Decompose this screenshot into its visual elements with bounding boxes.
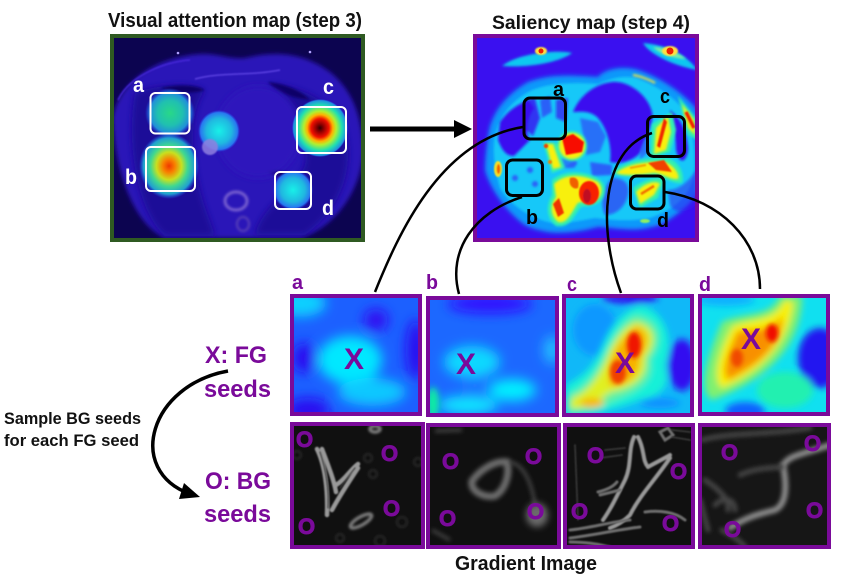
gradient panel b (428, 425, 559, 547)
box d (630, 176, 664, 209)
heading: FG seeds: seeds (204, 376, 271, 403)
label d: d (657, 210, 669, 232)
label b: b (426, 272, 438, 294)
BG seed markers (721, 431, 823, 542)
heading: BG seeds: O: BG (205, 468, 271, 495)
box a (150, 93, 190, 134)
saliency body ring (485, 68, 703, 233)
arrow: attention to saliency (370, 120, 472, 138)
box d (275, 172, 311, 209)
heat spot: c (292, 99, 348, 157)
chest bands (502, 52, 572, 66)
hot regions: yellow (546, 75, 695, 222)
note: sample BG seeds: for each FG seed (4, 431, 139, 450)
BG seed markers: O (587, 443, 604, 468)
box c (297, 107, 346, 153)
label b: b (125, 166, 137, 189)
connector c (607, 133, 652, 293)
FG seed marker: X (615, 347, 635, 380)
note: sample BG seeds: Sample BG seeds (4, 409, 141, 428)
FG seed marker: X (344, 343, 364, 376)
BG seed markers: O (296, 427, 313, 452)
BG seed markers: O (298, 514, 315, 539)
connector b (456, 197, 522, 294)
crop panel a (290, 294, 422, 416)
BG seed markers: O (804, 431, 821, 456)
BG seed markers: O (525, 444, 542, 469)
FG seed marker: X (741, 323, 761, 356)
BG seed markers: O (442, 449, 459, 474)
box c (648, 116, 684, 156)
gradient panel d (700, 425, 830, 547)
gradient panel c (565, 425, 693, 547)
box b (146, 147, 195, 191)
body silhouette (113, 54, 363, 238)
BG seed markers: O (670, 459, 687, 484)
BG seed markers: O (721, 440, 738, 465)
box a (524, 98, 566, 139)
heat spot: d (273, 170, 313, 210)
label b: b (526, 207, 538, 229)
BG seed markers: O (381, 441, 398, 466)
BG seed markers: O (806, 498, 823, 523)
FG seed marker: X (456, 348, 476, 381)
crop panel d (698, 294, 830, 416)
BG seed markers: O (724, 517, 741, 542)
BG seed markers (571, 443, 687, 536)
label d: d (322, 197, 334, 220)
label c: c (323, 76, 334, 99)
interior blue regions (498, 82, 696, 215)
connector a (375, 127, 523, 292)
heading: BG seeds (204, 468, 271, 528)
BG seed markers: O (383, 496, 400, 521)
hot regions: orange and red (494, 112, 694, 223)
heading: FG seeds: X: FG (205, 342, 267, 369)
heat spot: centre (198, 110, 240, 152)
heat spot: b (139, 133, 199, 199)
title: saliency map: Saliency map (step 4) (492, 12, 690, 34)
panel: visual attention map (112, 36, 363, 240)
lungs (132, 85, 215, 236)
box b (506, 160, 542, 196)
heading: FG seeds (204, 342, 271, 403)
crop panel c (564, 292, 696, 415)
BG seed markers: O (571, 499, 588, 524)
panel: saliency map (475, 36, 703, 240)
connector d (665, 192, 760, 289)
BG seed markers (296, 427, 400, 539)
hot regions: halos (543, 96, 697, 226)
label a: a (133, 74, 144, 97)
heat spot: a (145, 88, 195, 138)
crop panel b (427, 295, 560, 419)
note: sample BG seeds (4, 409, 141, 450)
label c: c (567, 274, 577, 296)
label a: a (292, 272, 304, 294)
gradient panel a (292, 424, 423, 547)
label d: d (699, 274, 711, 296)
heading: BG seeds: seeds (204, 501, 271, 528)
label c: c (660, 86, 670, 108)
BG seed markers: O (527, 499, 544, 524)
BG seed markers: O (662, 511, 679, 536)
label a: a (553, 79, 565, 101)
title: visual attention map: Visual attention map (step 3) (108, 10, 362, 32)
curved arrow: FG to BG (153, 371, 228, 499)
BG seed markers: O (439, 506, 456, 531)
caption: gradient image: Gradient Image (455, 553, 597, 575)
BG seed markers (439, 444, 544, 531)
